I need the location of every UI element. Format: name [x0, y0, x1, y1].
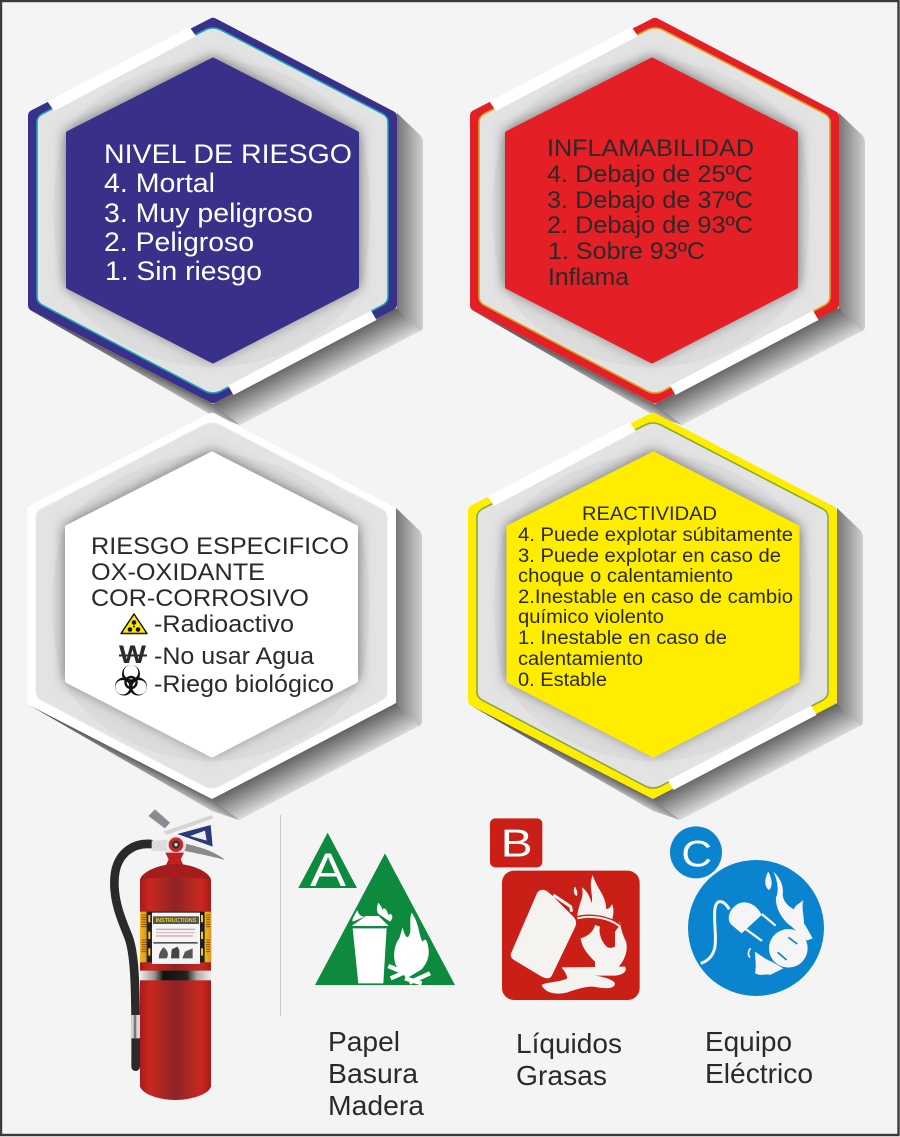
text: nivel de riesgo: NIVEL DE RIESGO	[104, 139, 352, 169]
panel: nivel de riesgo	[30, 24, 423, 425]
label: class B materials: Líquidos	[516, 1028, 622, 1059]
icon: class A: A	[310, 844, 346, 897]
icon: radioactive	[121, 614, 147, 634]
text: reactividad: 0. Estable	[518, 670, 607, 691]
text: nivel de riesgo: 1. Sin riesgo	[105, 256, 262, 286]
label: class C materials: Eléctrico	[705, 1058, 813, 1089]
text: inflamabilidad	[547, 135, 754, 291]
text: riesgo especifico	[91, 533, 349, 698]
text: reactividad: REACTIVIDAD	[582, 504, 717, 525]
label: class A materials: Papel	[328, 1026, 400, 1057]
icon: fire extinguisher: INSTRUCTIONS	[156, 918, 197, 924]
icon: no water: W	[119, 641, 146, 669]
panel: inflamabilidad	[472, 24, 865, 425]
text: reactividad: 3. Puede explotar en caso de	[518, 546, 781, 567]
text: nivel de riesgo: 3. Muy peligroso	[104, 198, 313, 228]
icon: class A	[298, 833, 455, 985]
text: reactividad: 1. Inestable en caso de	[518, 628, 727, 649]
text: inflamabilidad: 4. Debajo de 25ºC	[547, 161, 753, 188]
text: nivel de riesgo: 4. Mortal	[104, 168, 215, 198]
icon: class B	[490, 818, 640, 1000]
text: inflamabilidad: 2. Debajo de 93ºC	[547, 212, 753, 239]
text: reactividad: choque o calentamiento	[518, 566, 733, 587]
label: class A materials: Basura	[328, 1058, 418, 1089]
text: inflamabilidad: Inflama	[548, 264, 629, 291]
text: reactividad: 4. Puede explotar súbitamente	[518, 525, 793, 546]
label: class A materials	[328, 1026, 424, 1121]
icon: class B: B	[501, 822, 533, 866]
text: riesgo especifico: COR-CORROSIVO	[91, 585, 309, 612]
icon: class C	[670, 826, 824, 996]
text: reactividad	[518, 504, 793, 691]
text: inflamabilidad: 1. Sobre 93ºC	[548, 238, 705, 265]
label: class A materials: Madera	[328, 1090, 424, 1121]
label: class B materials: Grasas	[516, 1060, 607, 1091]
text: riesgo especifico: OX-OXIDANTE	[91, 559, 265, 586]
label: class C materials	[705, 1026, 813, 1089]
text: reactividad: químico violento	[518, 607, 664, 628]
text: riesgo especifico: -Radioactivo	[154, 611, 294, 638]
icon: fire extinguisher	[114, 809, 225, 1100]
icon: class C: C	[681, 833, 712, 875]
panel: reactividad	[470, 419, 863, 820]
icon: biohazard	[115, 665, 147, 696]
panel: riesgo especifico	[29, 419, 422, 820]
text: riesgo especifico: -No usar Agua	[154, 643, 314, 670]
text: riesgo especifico: RIESGO ESPECIFICO	[91, 533, 349, 560]
text: nivel de riesgo	[104, 139, 352, 286]
text: inflamabilidad: INFLAMABILIDAD	[547, 135, 754, 162]
label: class B materials	[516, 1028, 622, 1091]
text: nivel de riesgo: 2. Peligroso	[104, 227, 254, 257]
label: class C materials: Equipo	[705, 1026, 792, 1057]
text: reactividad: calentamiento	[518, 649, 643, 670]
text: riesgo especifico: -Riego biológico	[154, 671, 334, 698]
text: reactividad: 2.Inestable en caso de cambio	[518, 587, 793, 608]
text: inflamabilidad: 3. Debajo de 37ºC	[547, 187, 753, 214]
